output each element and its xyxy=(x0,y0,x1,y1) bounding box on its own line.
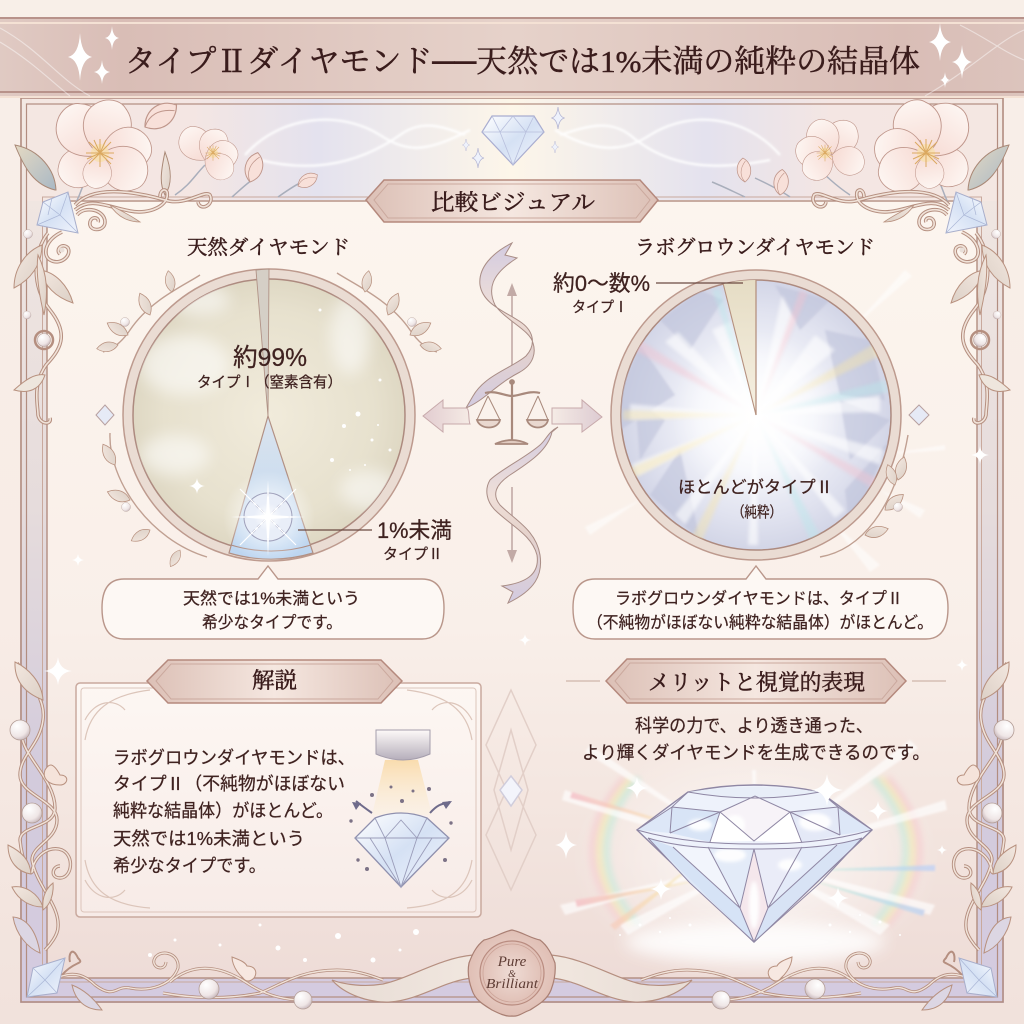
callout: natural: 希少なタイプです。 xyxy=(202,613,342,632)
callout: lab-grown: （不純物がほぼない純粋な結晶体）がほとんど。 xyxy=(587,613,933,632)
label: type I nitrogen: タイプⅠ（窒素含有） xyxy=(197,374,342,391)
lead text: 科学の力で、より透き通った、 xyxy=(635,716,873,736)
diamond highlights xyxy=(688,813,831,929)
body text: ラボグロウンダイヤモンドは、 xyxy=(113,748,355,768)
soft fog xyxy=(571,735,941,985)
vertical arrows xyxy=(511,290,513,555)
ribbon top xyxy=(466,243,534,408)
banner sparkles xyxy=(68,23,972,88)
label: under 1 percent: 1%未満 xyxy=(377,518,452,543)
heading plaque: merits: メリットと視覚的表現 xyxy=(648,670,865,695)
callout: natural xyxy=(102,566,444,639)
wax seal: Brilliant xyxy=(486,977,539,992)
icon: round brilliant xyxy=(231,480,305,556)
bottom ribbon and vines left xyxy=(130,953,473,1009)
slice: type I wedge xyxy=(723,270,756,415)
label: mostly type II: ほとんどがタイプⅡ xyxy=(678,478,833,497)
heading plaque: explanation xyxy=(147,660,402,703)
ribbon bottom xyxy=(487,427,558,603)
label: type I: タイプⅠ xyxy=(572,299,628,316)
section plaque: comparison visual: 比較ビジュアル xyxy=(431,190,595,215)
diamond gem marker right xyxy=(909,405,929,425)
section: merits and visual xyxy=(555,659,947,985)
sparkle floor xyxy=(619,914,901,962)
bottom ribbon and vines right xyxy=(551,953,894,1009)
callout: lab-grown: ラボグロウンダイヤモンドは、タイプⅡ xyxy=(615,589,903,608)
label: 99 percent: 約99% xyxy=(233,344,307,372)
slice: type II blue wedge xyxy=(229,416,313,559)
flowers top-left xyxy=(15,94,321,205)
vine lower-left xyxy=(8,662,130,1010)
section plaque: comparison visual xyxy=(366,180,658,222)
icon: balance scale xyxy=(477,380,548,444)
panel: lab-grown diamond xyxy=(553,236,948,639)
leader line xyxy=(298,529,372,531)
heading plaque: merits xyxy=(566,659,946,703)
icon: growth chamber and diamond xyxy=(349,730,453,887)
icon: top diamond xyxy=(462,107,565,168)
corner filigree xyxy=(85,690,472,908)
title banner xyxy=(0,18,1024,98)
arrow right xyxy=(552,400,602,432)
heading: natural diamond: 天然ダイヤモンド xyxy=(187,236,350,259)
wax seal xyxy=(468,930,555,1016)
lattice ornament xyxy=(486,690,536,890)
pie chart: lab-grown diamond xyxy=(611,270,901,560)
wreath ornament right pie xyxy=(820,435,909,557)
flowers top-right xyxy=(712,93,1009,205)
leader line xyxy=(656,282,743,284)
vertical arrowheads xyxy=(507,283,517,563)
body text: 純粋な結晶体）がほとんど。 xyxy=(113,801,333,821)
sparkles scattered xyxy=(44,446,989,962)
light rays xyxy=(560,740,947,935)
rainbow rays xyxy=(623,288,888,545)
body text: 天然では1%未満という xyxy=(113,829,305,849)
facets xyxy=(620,285,890,540)
panel: explanation xyxy=(76,660,481,917)
vine scroll top-right xyxy=(813,190,1010,423)
light rays outside right pie xyxy=(585,270,945,572)
panel: natural diamond xyxy=(96,236,452,639)
rainbow halo xyxy=(592,778,920,925)
sparkles xyxy=(555,774,947,909)
body text: 希少なタイプです。 xyxy=(113,856,266,876)
wax seal: Pure xyxy=(497,954,527,970)
body text: タイプⅡ（不純物がほぼない xyxy=(113,774,345,794)
body text xyxy=(113,748,355,876)
wax seal: & xyxy=(508,969,516,980)
heading plaque: explanation: 解説 xyxy=(252,668,297,693)
label: pure: （純粋） xyxy=(732,504,782,521)
callout: natural: 天然では1%未満という xyxy=(183,589,360,608)
icon: large brilliant diamond xyxy=(637,785,872,942)
center comparison ornament xyxy=(423,243,602,603)
diamond gem marker left xyxy=(96,405,114,425)
heading: lab-grown diamond: ラボグロウンダイヤモンド xyxy=(635,236,875,259)
vine scroll top-left xyxy=(14,190,211,423)
top glowing swirl lines xyxy=(245,120,780,166)
slice: thin top wedge xyxy=(256,269,269,416)
label: type II: タイプⅡ xyxy=(383,546,443,563)
callout: lab-grown xyxy=(573,566,948,639)
vine lower-right xyxy=(894,662,1016,1010)
lead text xyxy=(582,716,930,763)
wreath ornaments left pie xyxy=(96,270,442,569)
lead text: より輝くダイヤモンドを生成できるのです。 xyxy=(582,743,930,763)
label: 0 to several percent: 約0〜数% xyxy=(553,271,650,296)
pie chart: natural diamond xyxy=(123,269,415,563)
title text: タイプⅡダイヤモンド──天然では1%未満の純粋の結晶体 xyxy=(125,44,920,79)
arrow left xyxy=(423,400,470,432)
